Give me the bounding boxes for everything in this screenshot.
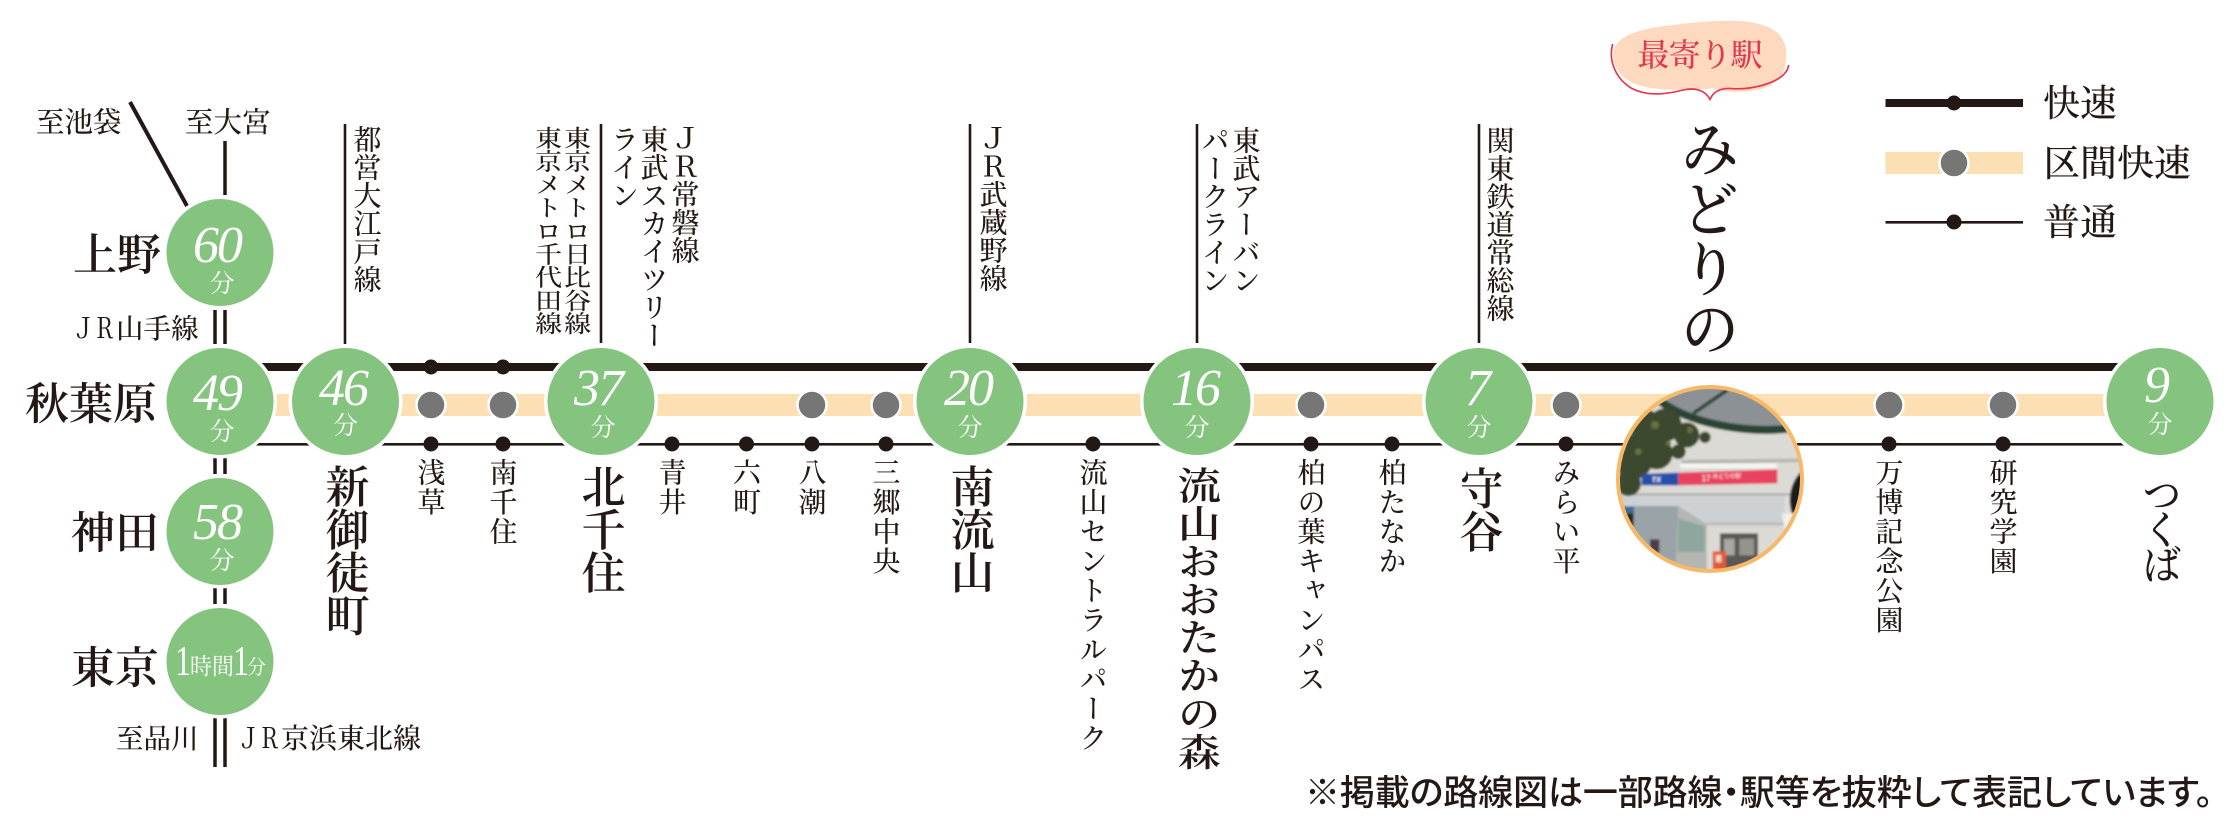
left destinations and stations [25,107,421,755]
badge: Tsukuba 9 min [2103,344,2217,458]
legend: semi-express [1886,143,2191,185]
branch lines at left [130,102,225,767]
main route lines [220,363,2160,446]
semi-express stops [416,390,2018,420]
callout: nearest station [1611,21,1789,99]
station: Tokyo: 東京 [71,644,159,693]
station: Nagareyama Central Park: 流山セントラルパーク [1076,458,1108,753]
badge: Tokyo 1h 1min: 1 [233,639,249,685]
station: Tsukuba: つくば [2136,474,2182,582]
station: Minami-Senju: 南千住 [486,458,518,546]
callout text: 最寄り駅 [1637,37,1763,73]
badge: Akihabara 49 min [163,344,277,458]
station: Kanda: 神田 [71,509,159,558]
line name: Tobu Urban Park continued: パークライン [1198,126,1228,294]
station name: Midorino: みどりの [1672,118,1738,358]
station: Miraidaira: みらい平 [1548,458,1580,576]
badge: Tokyo 1h 1min: 分 [247,656,266,679]
station: Shin-Okachimachi: 新御徒町 [318,464,368,636]
label: Yamanote line [73,313,198,345]
transfer line ticks [345,124,1479,344]
station: Rokucho: 六町 [729,458,760,517]
station: Minami-Nagareyama: 南流山 [944,464,994,593]
badge: Shin-Okachimachi 46 min [288,344,402,458]
legend: local: 普通 [2043,202,2117,244]
badge: Tokyo 1h 1min: 時間 [190,654,234,679]
badge: Ueno 60 min: 分 [209,270,235,298]
line name: Tobu Skytree: 東武スカイツリー [636,125,668,349]
line name: Musashino: ＪＲ武蔵野線 [976,124,1008,292]
badge: Ueno 60 min: 60 [193,217,243,274]
station: Misato-Chuo: 三郷中央 [868,458,900,576]
label: to Ikebukuro: 至池袋 [36,107,122,139]
label: Yamanote line: 山手線 [116,313,198,344]
callout outline [1611,44,1789,99]
badge: Akihabara 49 min: 分 [209,418,235,446]
line name: Kanto Joso: 関東鉄道常総線 [1482,126,1514,322]
badge: Minami-Nagareyama 20 min: 分 [957,414,983,442]
badge: Tokyo 1h 1min [163,604,277,718]
line: semi-express [220,394,2160,416]
badge: Ueno 60 min [163,196,277,310]
label: Yamanote line: ＪＲ [73,314,115,345]
badge: Nagareyama-Otakanomori 16 min: 16 [1171,360,1221,417]
express stops [424,360,510,374]
badge: Tsukuba 9 min: 分 [2147,411,2173,439]
callout bubble [1613,21,1786,92]
badge: Minami-Nagareyama 20 min: 20 [944,360,994,417]
station: Akihabara: 秋葉原 [25,380,158,429]
station badges [163,196,2217,718]
line name: Toei Oedo: 都営大江戸線 [350,125,382,293]
label: Keihin-Tohoku line: ＪＲ [238,724,280,755]
badge: Kita-Senju 37 min: 37 [573,360,626,417]
line name: Hibiya: 東京メトロ日比谷線 [561,126,591,335]
badge: Shin-Okachimachi 46 min: 分 [333,412,358,440]
station: Kita-Senju: 北千住 [574,464,626,593]
label: Keihin-Tohoku line: 京浜東北線 [281,723,421,755]
badge: Kita-Senju 37 min [544,344,658,458]
line name: Chiyoda: 東京メトロ千代田線 [532,126,562,335]
label: to Shinagawa: 至品川 [116,723,198,754]
station: Banpaku-Kinen-Koen: 万博記念公園 [1872,458,1904,635]
station: Aoi: 青井 [654,458,686,517]
photo: Midorino station: TX [1652,475,1662,484]
station: Kashiwa-Tanaka: 柏たなか [1374,458,1406,576]
connecting line names [350,124,1514,349]
legend: local [1886,202,2117,244]
footnote: ※掲載の路線図は一部路線・駅等を抜粋して表記しています。 [1305,774,2213,813]
local stops [424,436,2010,452]
legend: semi-express: 区間快速 [2043,143,2191,185]
badge: Shin-Okachimachi 46 min: 46 [319,360,369,417]
badge: Minami-Nagareyama 20 min [913,344,1027,458]
photo: Midorino station: みどりの駅 [1713,472,1741,480]
badge: Tokyo 1h 1min: 1 [175,639,191,685]
badge: Kanda 58 min: 58 [193,494,243,551]
station: Nagareyama-Otakanomori: 流山おおたかの森 [1171,466,1219,770]
badge: Moriya 7 min [1422,344,1536,458]
photo: Midorino station: 17 [1702,474,1711,483]
badge: Kanda 58 min [163,474,277,588]
line name: Tobu Skytree continued: ライン [607,125,638,209]
station: Moriya: 守谷 [1452,466,1502,552]
line: express [220,363,2160,371]
legend: express [1886,83,2117,125]
station: Kenkyu-Gakuen: 研究学園 [1986,458,2018,576]
major station names [318,464,2182,770]
photo: Midorino station [1616,385,1804,573]
line name: Joban: ＪＲ常磐線 [668,124,700,264]
legend [1886,83,2191,244]
badge: Moriya 7 min: 分 [1466,414,1492,442]
label: to Omiya: 至大宮 [185,107,271,139]
line: local [220,443,2160,446]
badge: Nagareyama-Otakanomori 16 min: 分 [1184,414,1210,442]
badge: Kita-Senju 37 min: 分 [590,414,616,442]
badge: Moriya 7 min: 7 [1465,360,1493,417]
badge: Kanda 58 min: 分 [209,547,235,575]
station: Yashio: 八潮 [794,458,826,517]
badge: Akihabara 49 min: 49 [193,365,243,422]
local station names [414,458,2018,753]
station: Asakusa: 浅草 [414,458,446,517]
intermediate station dots [416,360,2018,452]
legend: express: 快速 [2043,83,2117,125]
station: Kashiwanoha Campus: 柏の葉キャンパス [1294,458,1326,694]
station: Ueno: 上野 [73,231,161,280]
line name: Tobu Urban Park: 東武アーバン [1228,126,1260,294]
badge: Nagareyama-Otakanomori 16 min [1140,344,1254,458]
badge: Tsukuba 9 min: 9 [2144,357,2170,414]
